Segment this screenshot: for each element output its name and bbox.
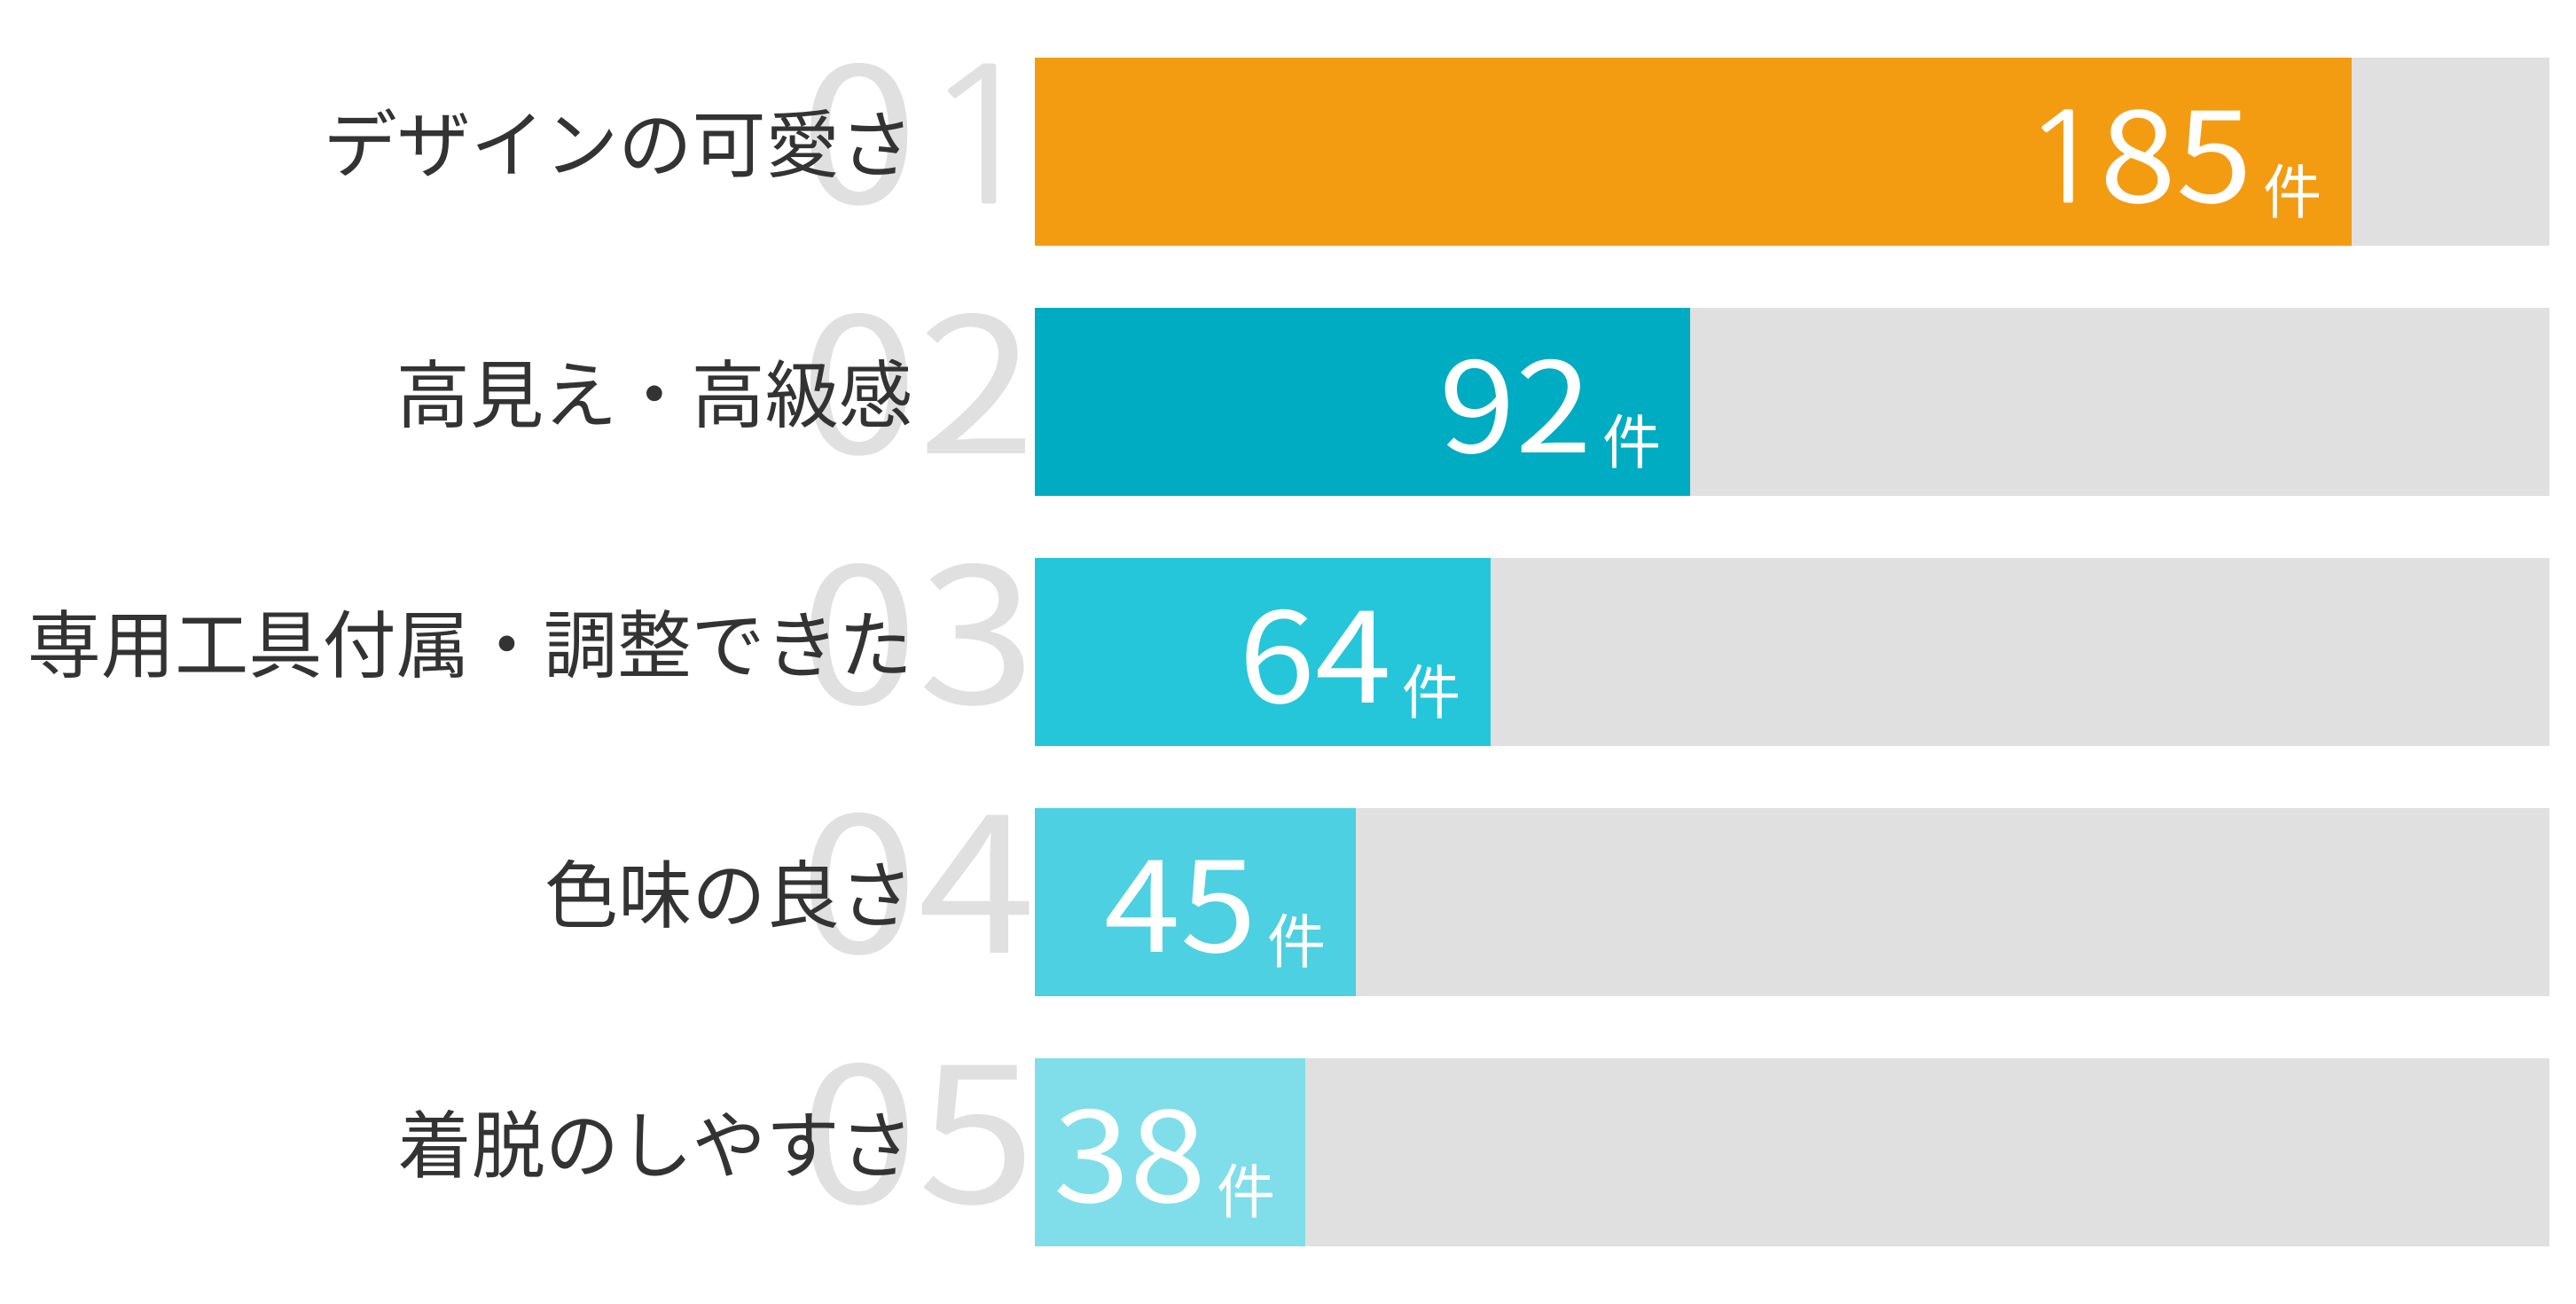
bar track bbox=[1035, 308, 2549, 496]
unit: 件 bbox=[2263, 160, 2322, 225]
label: デザインの可愛さ bbox=[323, 105, 913, 187]
value: 185 bbox=[2022, 57, 2252, 239]
label: 高見え・高級感 bbox=[396, 355, 912, 437]
bar track bbox=[1035, 1058, 2549, 1246]
unit: 件 bbox=[1602, 410, 1661, 475]
row 2: 高見え・高級感 92件 bbox=[396, 236, 2549, 508]
row 5: 着脱のしやすさ 38件 bbox=[398, 986, 2549, 1258]
bar fill bbox=[1035, 558, 1491, 746]
bar fill bbox=[1035, 1058, 1305, 1246]
value: 38 bbox=[1053, 1057, 1206, 1238]
bar fill bbox=[1035, 58, 2352, 246]
rank number 04: 04 bbox=[800, 735, 1036, 1008]
label: 色味の良さ bbox=[544, 855, 913, 938]
rank number 03: 03 bbox=[800, 486, 1036, 758]
row 1: デザインの可愛さ 185件 bbox=[323, 0, 2549, 258]
value: 92 bbox=[1439, 307, 1592, 489]
unit: 件 bbox=[1267, 909, 1326, 975]
bar fill bbox=[1035, 808, 1356, 996]
value: 64 bbox=[1239, 557, 1391, 739]
label: 専用工具付属・調整できた bbox=[27, 605, 912, 687]
value: 45 bbox=[1104, 806, 1257, 988]
label: 着脱のしやすさ bbox=[398, 1105, 913, 1188]
bar fill bbox=[1035, 308, 1690, 496]
rank number 05: 05 bbox=[800, 986, 1036, 1258]
row 4: 色味の良さ 45件 bbox=[544, 735, 2549, 1008]
rank number 02: 02 bbox=[800, 236, 1036, 508]
bar track bbox=[1035, 558, 2549, 746]
bar track bbox=[1035, 808, 2549, 996]
row 3: 専用工具付属・調整できた 64件 bbox=[27, 486, 2549, 758]
bar track bbox=[1035, 58, 2549, 246]
unit: 件 bbox=[1217, 1159, 1275, 1225]
unit: 件 bbox=[1402, 660, 1460, 726]
